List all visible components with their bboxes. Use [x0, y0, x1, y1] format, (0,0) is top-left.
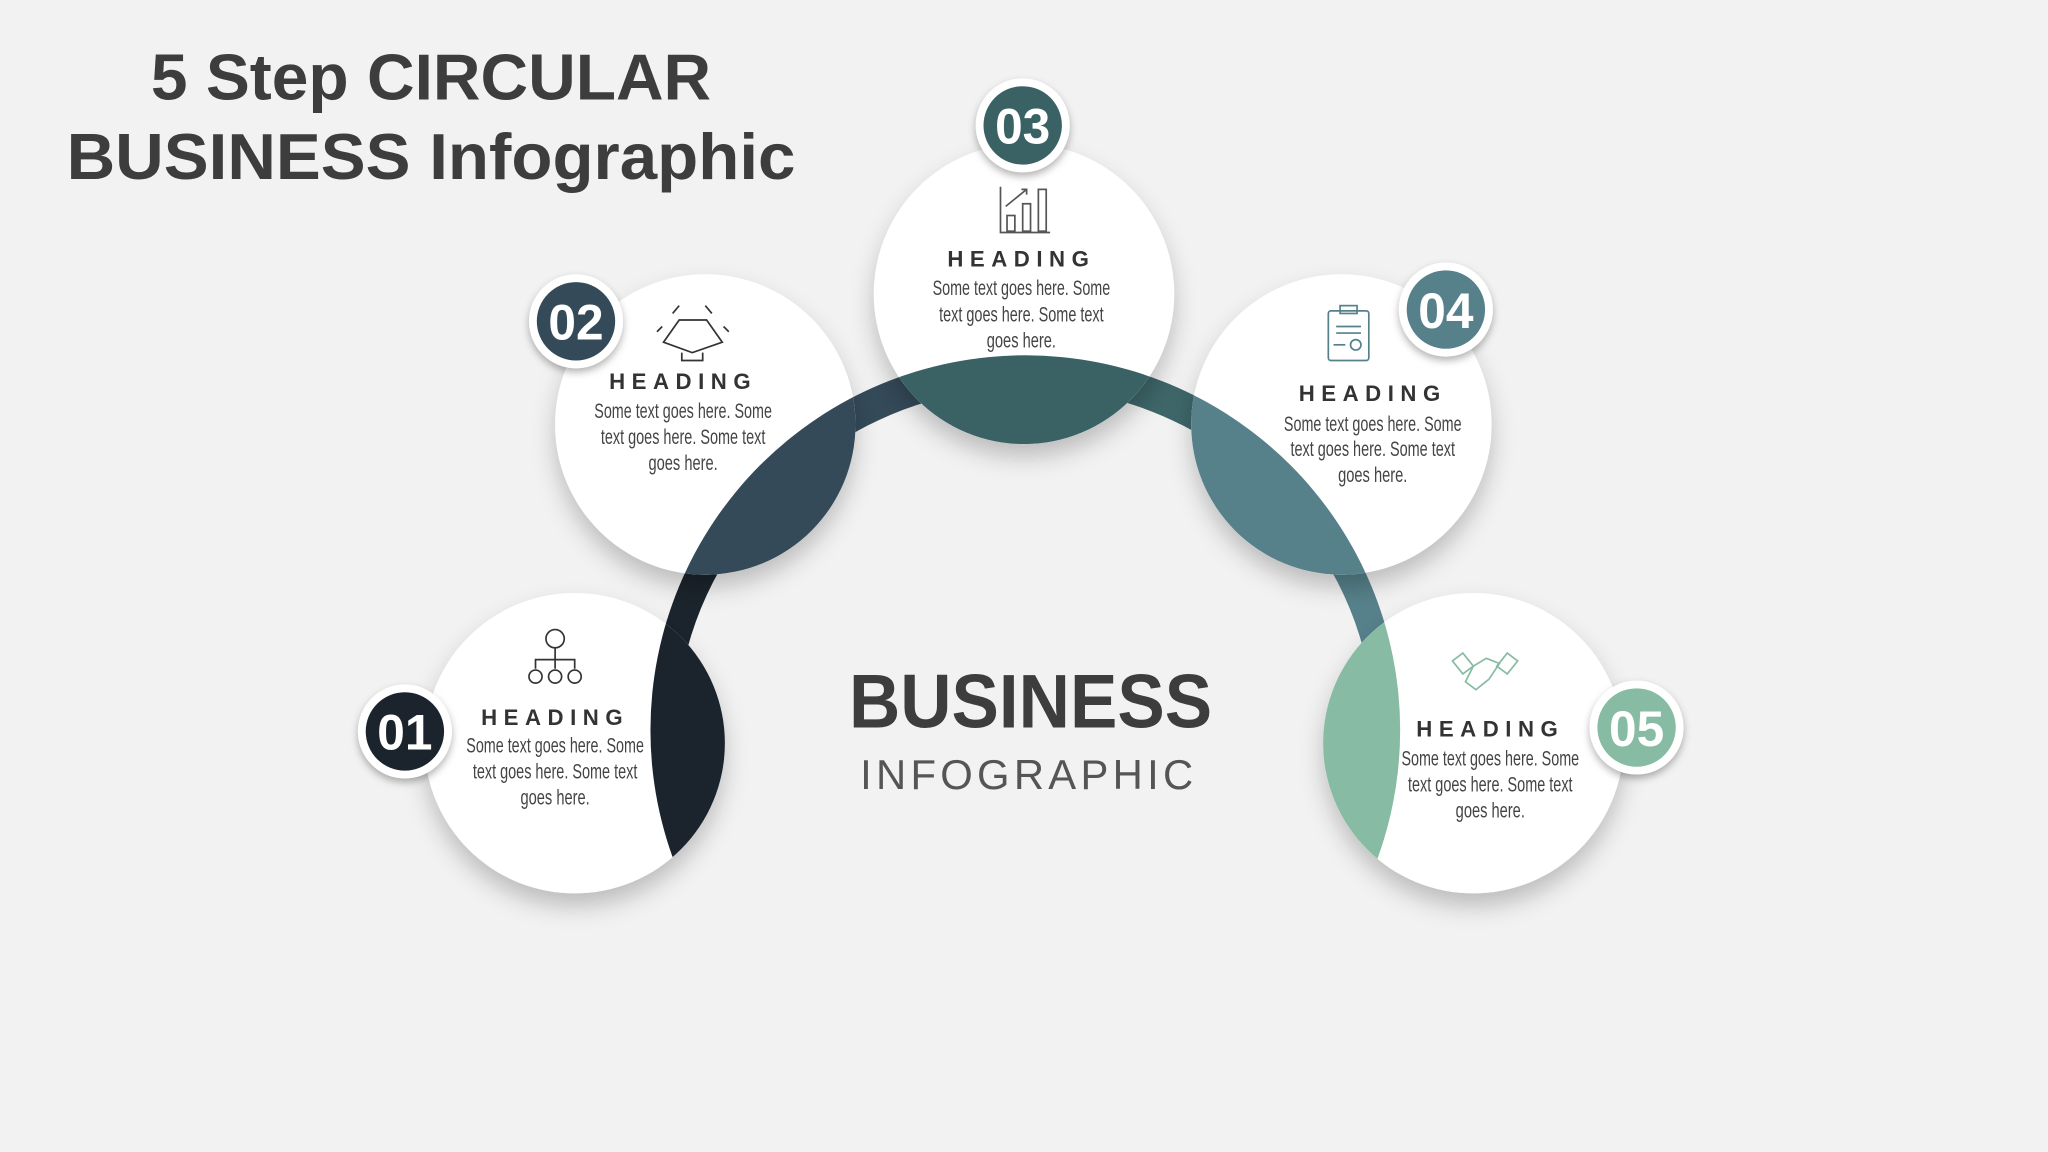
- step 03: [862, 149, 1186, 468]
- step 05: [1312, 593, 1633, 918]
- step 05: Some text goes here. Some: [1401, 747, 1579, 770]
- step 05: HEADING: [1416, 717, 1564, 742]
- step 05: goes here.: [1456, 800, 1525, 823]
- badge 02: 02: [548, 295, 604, 351]
- badge 04: 04: [1418, 283, 1474, 339]
- step 03: text goes here. Some text: [939, 303, 1104, 326]
- step 02: Some text goes here. Some: [594, 400, 772, 423]
- title: BUSINESS Infographic: [67, 120, 795, 193]
- ring band: [666, 376, 1384, 645]
- icon: bar chart: [1000, 187, 1050, 232]
- icon: handshake: [1452, 653, 1518, 690]
- step 02: HEADING: [609, 369, 757, 394]
- step 04: text goes here. Some text: [1290, 438, 1455, 461]
- badge 03: [976, 78, 1070, 172]
- step 04: HEADING: [1299, 381, 1447, 406]
- badge 01: 01: [377, 705, 432, 761]
- step 03: Some text goes here. Some: [933, 277, 1110, 300]
- step 02: [544, 274, 867, 599]
- step 05: text goes here. Some text: [1408, 774, 1573, 797]
- badge 02: [529, 274, 623, 368]
- step 04: [1180, 274, 1503, 599]
- icon: certificate clipboard: [1328, 306, 1369, 360]
- step 02: goes here.: [648, 452, 718, 475]
- step 01: Some text goes here. Some: [466, 734, 644, 757]
- step 04: Some text goes here. Some: [1284, 413, 1462, 436]
- step 03: goes here.: [987, 329, 1056, 352]
- icon: meeting table: [657, 306, 729, 360]
- step 01: [416, 593, 736, 918]
- badge 05: [1590, 680, 1684, 775]
- badge 04: [1399, 263, 1493, 357]
- badge 05: 05: [1609, 701, 1664, 757]
- icon: org chart: [529, 630, 581, 683]
- step 04: goes here.: [1338, 464, 1407, 487]
- center title: [849, 660, 1212, 798]
- step 02: text goes here. Some text: [601, 426, 766, 449]
- center title: BUSINESS: [849, 660, 1212, 745]
- badge 03: 03: [995, 99, 1050, 155]
- step 01: text goes here. Some text: [473, 760, 638, 783]
- center title: INFOGRAPHIC: [860, 751, 1193, 798]
- step 01: goes here.: [520, 787, 590, 810]
- title: 5 Step CIRCULAR: [151, 40, 711, 113]
- step 03: HEADING: [947, 246, 1095, 271]
- step 01: HEADING: [481, 705, 629, 730]
- title: [67, 40, 795, 193]
- badge 01: [358, 684, 452, 778]
